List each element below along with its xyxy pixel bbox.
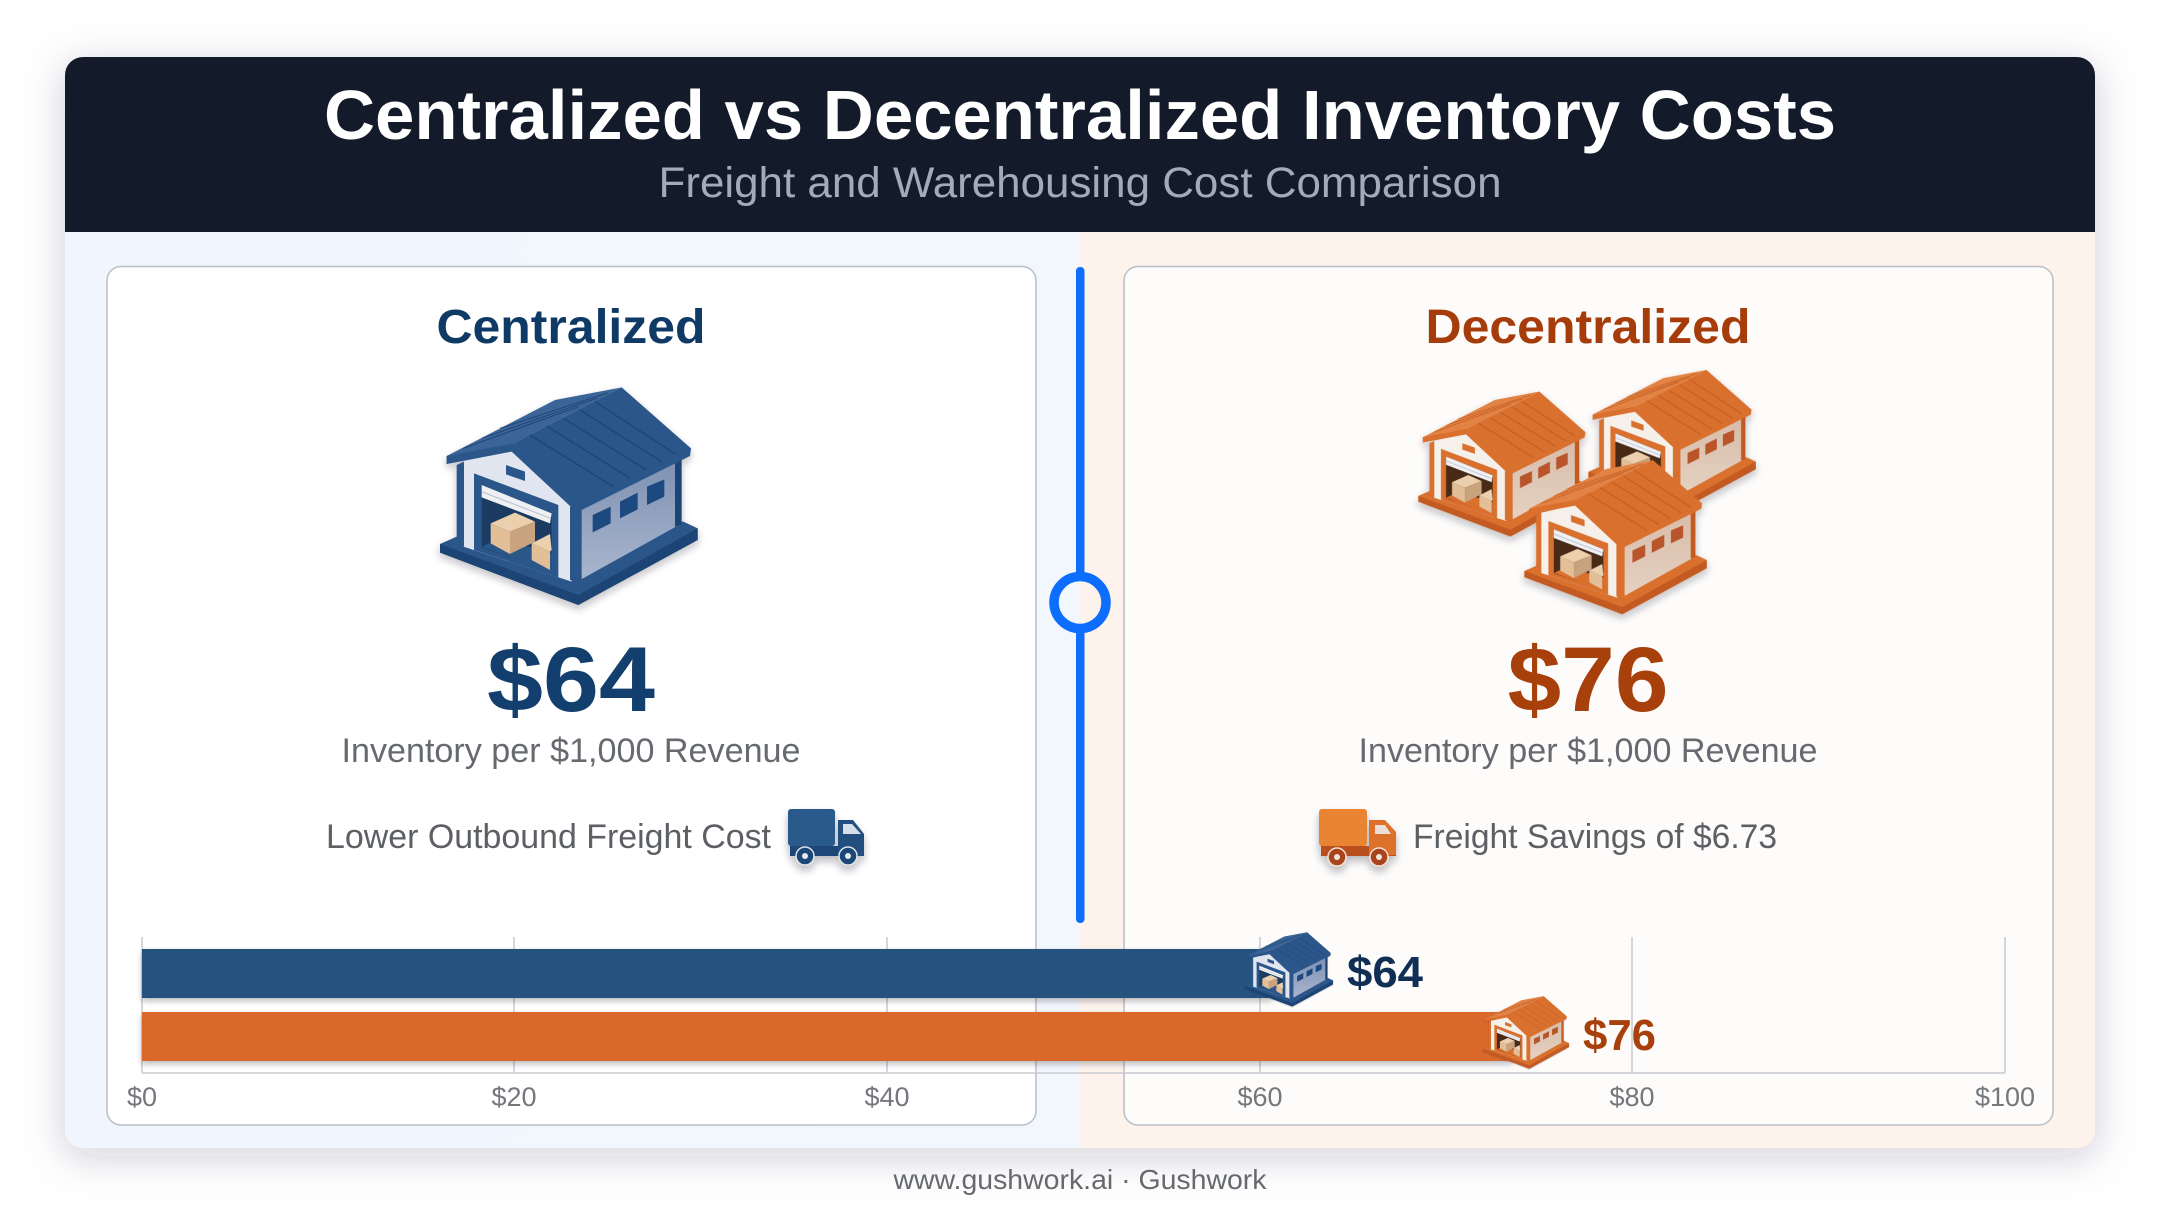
center divider with circle marker [1054,267,1106,923]
panel: centralized [107,266,1036,1125]
axis labels: $80 [1609,1082,1655,1112]
bar: centralized [142,949,1272,998]
caption: inventory: Inventory per $1,000 Revenue [1358,732,1818,770]
value: $76: $76 [1508,629,1668,731]
axis labels: $60 [1237,1082,1283,1112]
subtitle: Freight and Warehousing Cost Comparison [658,159,1502,207]
icon: three orange warehouses [1415,370,1760,622]
value: $64: $64 [487,629,655,731]
heading: centralized: Centralized [436,301,706,354]
label: $64: $64 [1347,948,1424,997]
title: Centralized vs Decentralized Inventory Costs [324,76,1836,154]
bar: decentralized [142,1012,1512,1061]
axis labels: $0 [127,1082,157,1112]
icon: blue truck [788,809,864,865]
bar chart [127,932,2035,1112]
icon: small blue warehouse [1245,932,1334,1008]
label: $76: $76 [1583,1011,1656,1060]
icon: orange truck [1319,809,1396,866]
caption: inventory: Inventory per $1,000 Revenue [342,732,800,770]
icon: blue warehouse [436,387,702,612]
panel: decentralized [1124,266,2053,1125]
heading: decentralized: Decentralized [1426,301,1750,354]
icon: small orange warehouse [1482,996,1570,1070]
axis labels [127,1082,2035,1112]
axis labels: $20 [491,1082,537,1112]
header band [65,57,2095,232]
axis labels: $40 [864,1082,910,1112]
freight note: Freight Savings of $6.73 [1413,818,1777,856]
footer credit: www.gushwork.ai · Gushwork [892,1164,1268,1195]
axis labels: $100 [1975,1082,2035,1112]
freight note: Lower Outbound Freight Cost [326,818,772,856]
